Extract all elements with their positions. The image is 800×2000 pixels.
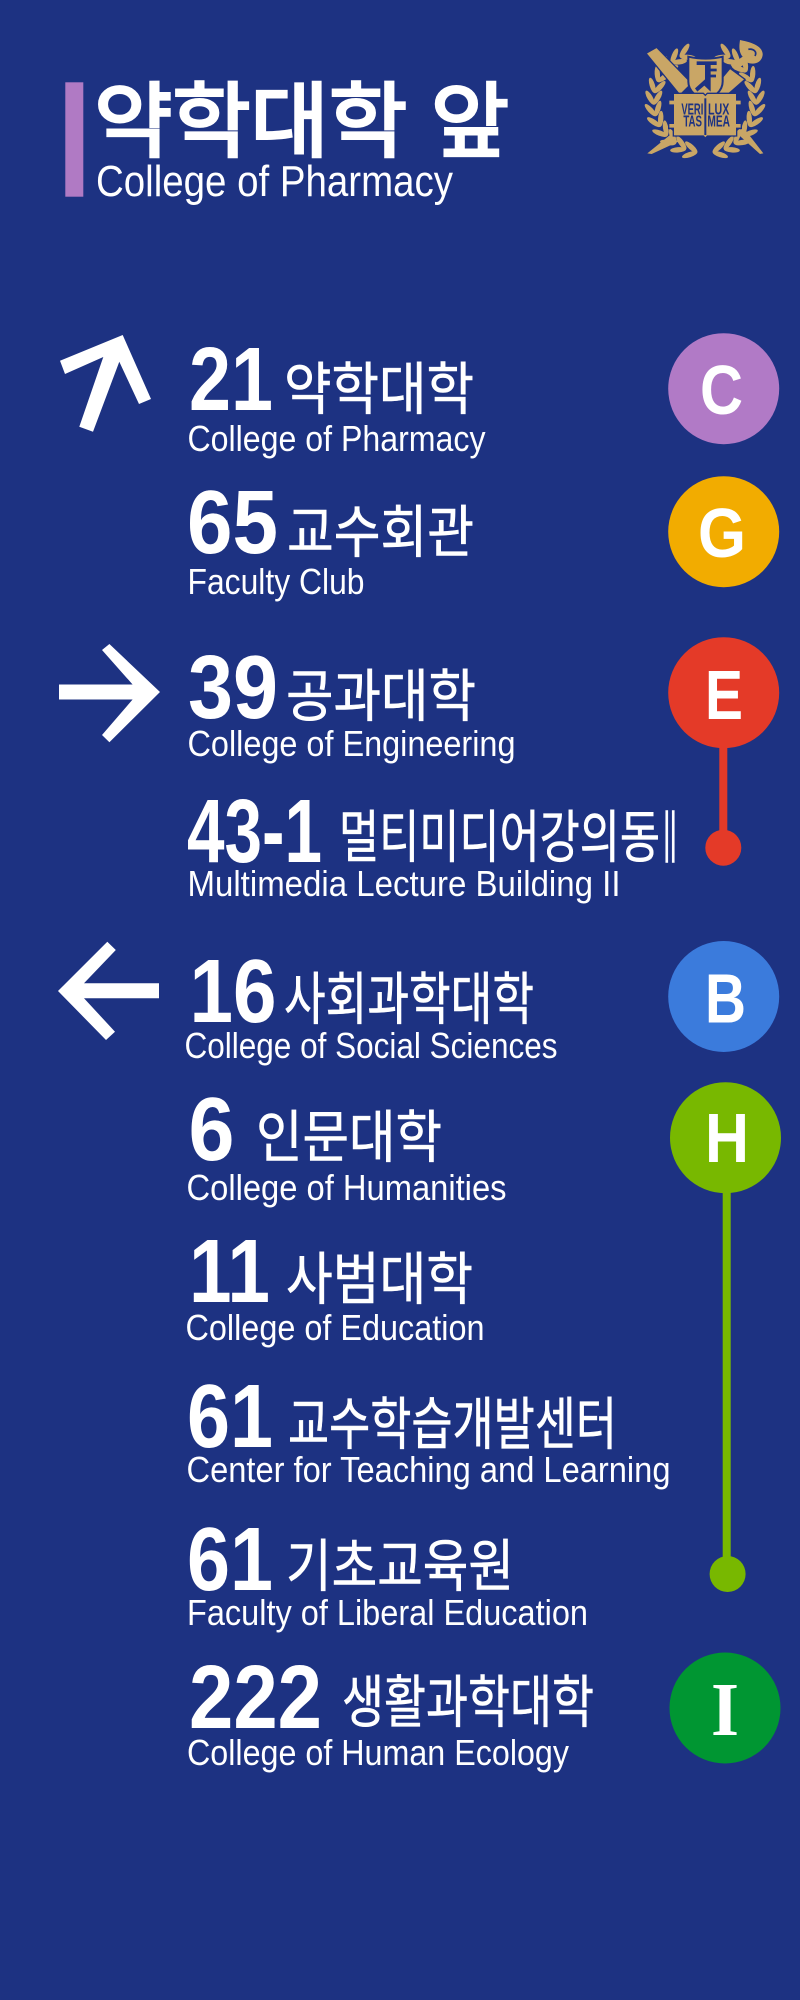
badge: H with line and end dot	[670, 1082, 781, 1592]
row: 39 College of Engineering	[188, 638, 516, 764]
title accent bar	[65, 82, 83, 197]
row: 16 College of Social Sciences: 16	[190, 942, 276, 1042]
row: 43-1 Multimedia Lecture Building II: Multimedia Lecture Building II	[188, 863, 620, 904]
row: 6 College of Humanities: 6	[188, 1080, 234, 1180]
badge: E with line and end dot: E	[705, 656, 743, 734]
row: 222 College of Human Ecology: 222	[189, 1648, 322, 1748]
row: 21 College of Pharmacy: College of Pharmacy	[188, 418, 486, 459]
row: 61 Faculty of Liberal Education: 기초교육원	[286, 1535, 514, 1599]
row: 222 College of Human Ecology	[187, 1648, 594, 1773]
badge: H with line and end dot: H	[705, 1099, 749, 1177]
row: 39 College of Engineering: College of Engineering	[188, 723, 516, 764]
row: 21 College of Pharmacy: 약학대학	[284, 358, 474, 422]
arrow: right	[59, 644, 160, 742]
torch	[713, 68, 745, 98]
row: 61 Center for Teaching and Learning: 61	[187, 1367, 273, 1467]
badge: B: B	[705, 960, 746, 1038]
row: 43-1 Multimedia Lecture Building II: 멀티미디어강의동	[339, 806, 660, 870]
row: 39 College of Engineering: 39	[188, 638, 278, 738]
row: 65 Faculty Club: Faculty Club	[188, 561, 364, 602]
badge: E with line and end dot	[668, 637, 779, 866]
badge: G: G	[698, 494, 746, 572]
row: 16 College of Social Sciences	[184, 942, 558, 1066]
row: 11 College of Education: 사범대학	[286, 1248, 473, 1312]
row: 61 Center for Teaching and Learning: Center for Teaching and Learning	[186, 1449, 670, 1490]
arrow: left	[58, 942, 159, 1040]
row: 16 College of Social Sciences: College of Social Sciences	[184, 1025, 558, 1066]
badge: I: I	[711, 1668, 739, 1752]
row: 21 College of Pharmacy	[188, 330, 486, 459]
icon: university emblem	[643, 40, 767, 163]
row: 11 College of Education	[186, 1222, 484, 1348]
title block	[65, 77, 509, 206]
row: 61 Center for Teaching and Learning	[186, 1367, 670, 1490]
text: Ⅱ	[659, 799, 681, 877]
sword	[646, 47, 692, 95]
badge: G	[668, 476, 779, 587]
row: 222 College of Human Ecology: 생활과학대학	[342, 1671, 594, 1735]
row: 65 Faculty Club: 65	[187, 473, 278, 573]
row: 6 College of Humanities: 인문대학	[256, 1106, 442, 1170]
row: 21 College of Pharmacy: 21	[189, 330, 273, 430]
row: 61 Center for Teaching and Learning: 교수학습개발센터	[288, 1393, 617, 1457]
row: 16 College of Social Sciences: 사회과학대학	[284, 968, 534, 1032]
badge: I	[670, 1652, 780, 1764]
row: 61 Faculty of Liberal Education: 61	[187, 1510, 273, 1610]
book motto: VERI	[681, 101, 703, 118]
arrow: up	[60, 335, 151, 432]
row: 43-1 Multimedia Lecture Building II	[187, 782, 681, 904]
title: English: College of Pharmacy	[96, 157, 453, 206]
badge: C: C	[700, 351, 743, 429]
row: 39 College of Engineering: 공과대학	[286, 665, 476, 729]
row: 65 Faculty Club: 교수회관	[287, 501, 474, 565]
row: 11 College of Education: 11	[189, 1222, 270, 1322]
icon: university emblem: LUX	[708, 101, 730, 118]
book	[669, 93, 741, 138]
row: 6 College of Humanities	[186, 1080, 506, 1208]
shield	[688, 57, 723, 100]
row: 61 Faculty of Liberal Education	[187, 1510, 588, 1633]
row: 61 Faculty of Liberal Education: Faculty of Liberal Education	[187, 1592, 588, 1633]
row: 43-1 Multimedia Lecture Building II: 43-1	[187, 782, 322, 882]
row: 222 College of Human Ecology: College of Human Ecology	[187, 1732, 569, 1773]
row: 11 College of Education: College of Education	[186, 1307, 484, 1348]
title: Korean: 약학대학 앞	[94, 77, 509, 168]
badge: C	[668, 333, 779, 444]
row: 6 College of Humanities: College of Humanities	[186, 1167, 506, 1208]
icon: university emblem: TAS	[683, 114, 702, 131]
icon: university emblem: MEA	[707, 114, 730, 131]
badge: B	[668, 941, 779, 1052]
row: 65 Faculty Club	[187, 473, 474, 602]
